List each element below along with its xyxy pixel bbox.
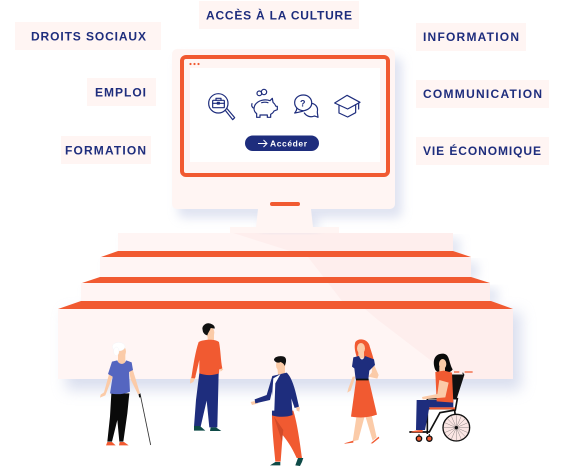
- monitor stand: [230, 209, 339, 233]
- label: droits sociaux: [15, 22, 161, 50]
- icon: arrow: [258, 140, 267, 147]
- label: droits sociaux: DROITS SOCIAUX: [31, 30, 146, 44]
- person: woman in wheelchair: [409, 354, 473, 441]
- label: information: INFORMATION: [423, 30, 519, 44]
- icon: graduation cap: [335, 95, 360, 117]
- label: emploi: EMPLOI: [95, 86, 146, 100]
- person: man in navy jacket: [251, 356, 303, 466]
- button: accéder: [245, 136, 319, 151]
- stand bar: [270, 202, 300, 206]
- person: man in orange sweater: [190, 323, 223, 431]
- icon: job search magnifier: [209, 94, 235, 120]
- label: vie économique: [416, 137, 549, 165]
- label: formation: [61, 136, 151, 164]
- person: woman in red skirt: [344, 339, 379, 444]
- icon: piggy bank: [252, 89, 277, 117]
- label: emploi: [87, 78, 156, 106]
- icon: question speech bubbles: [295, 95, 318, 117]
- label: vie économique: VIE ÉCONOMIQUE: [423, 143, 541, 158]
- label: accès à la culture: ACCÈS À LA CULTURE: [206, 8, 352, 22]
- person: old woman with cane: [100, 342, 151, 445]
- icons on screen: [209, 89, 360, 120]
- monitor: [172, 49, 402, 233]
- wheelchair: [409, 372, 473, 441]
- label: communication: [416, 80, 549, 108]
- label: accès à la culture: [199, 1, 359, 29]
- label: formation: FORMATION: [65, 144, 146, 158]
- window dots: [189, 63, 200, 65]
- staircase: [58, 225, 521, 390]
- icon: question speech bubbles: ?: [300, 99, 305, 109]
- label: information: [416, 23, 526, 51]
- screen frame: [182, 57, 388, 175]
- label: communication: COMMUNICATION: [423, 87, 542, 101]
- button: accéder: Accéder: [270, 138, 308, 148]
